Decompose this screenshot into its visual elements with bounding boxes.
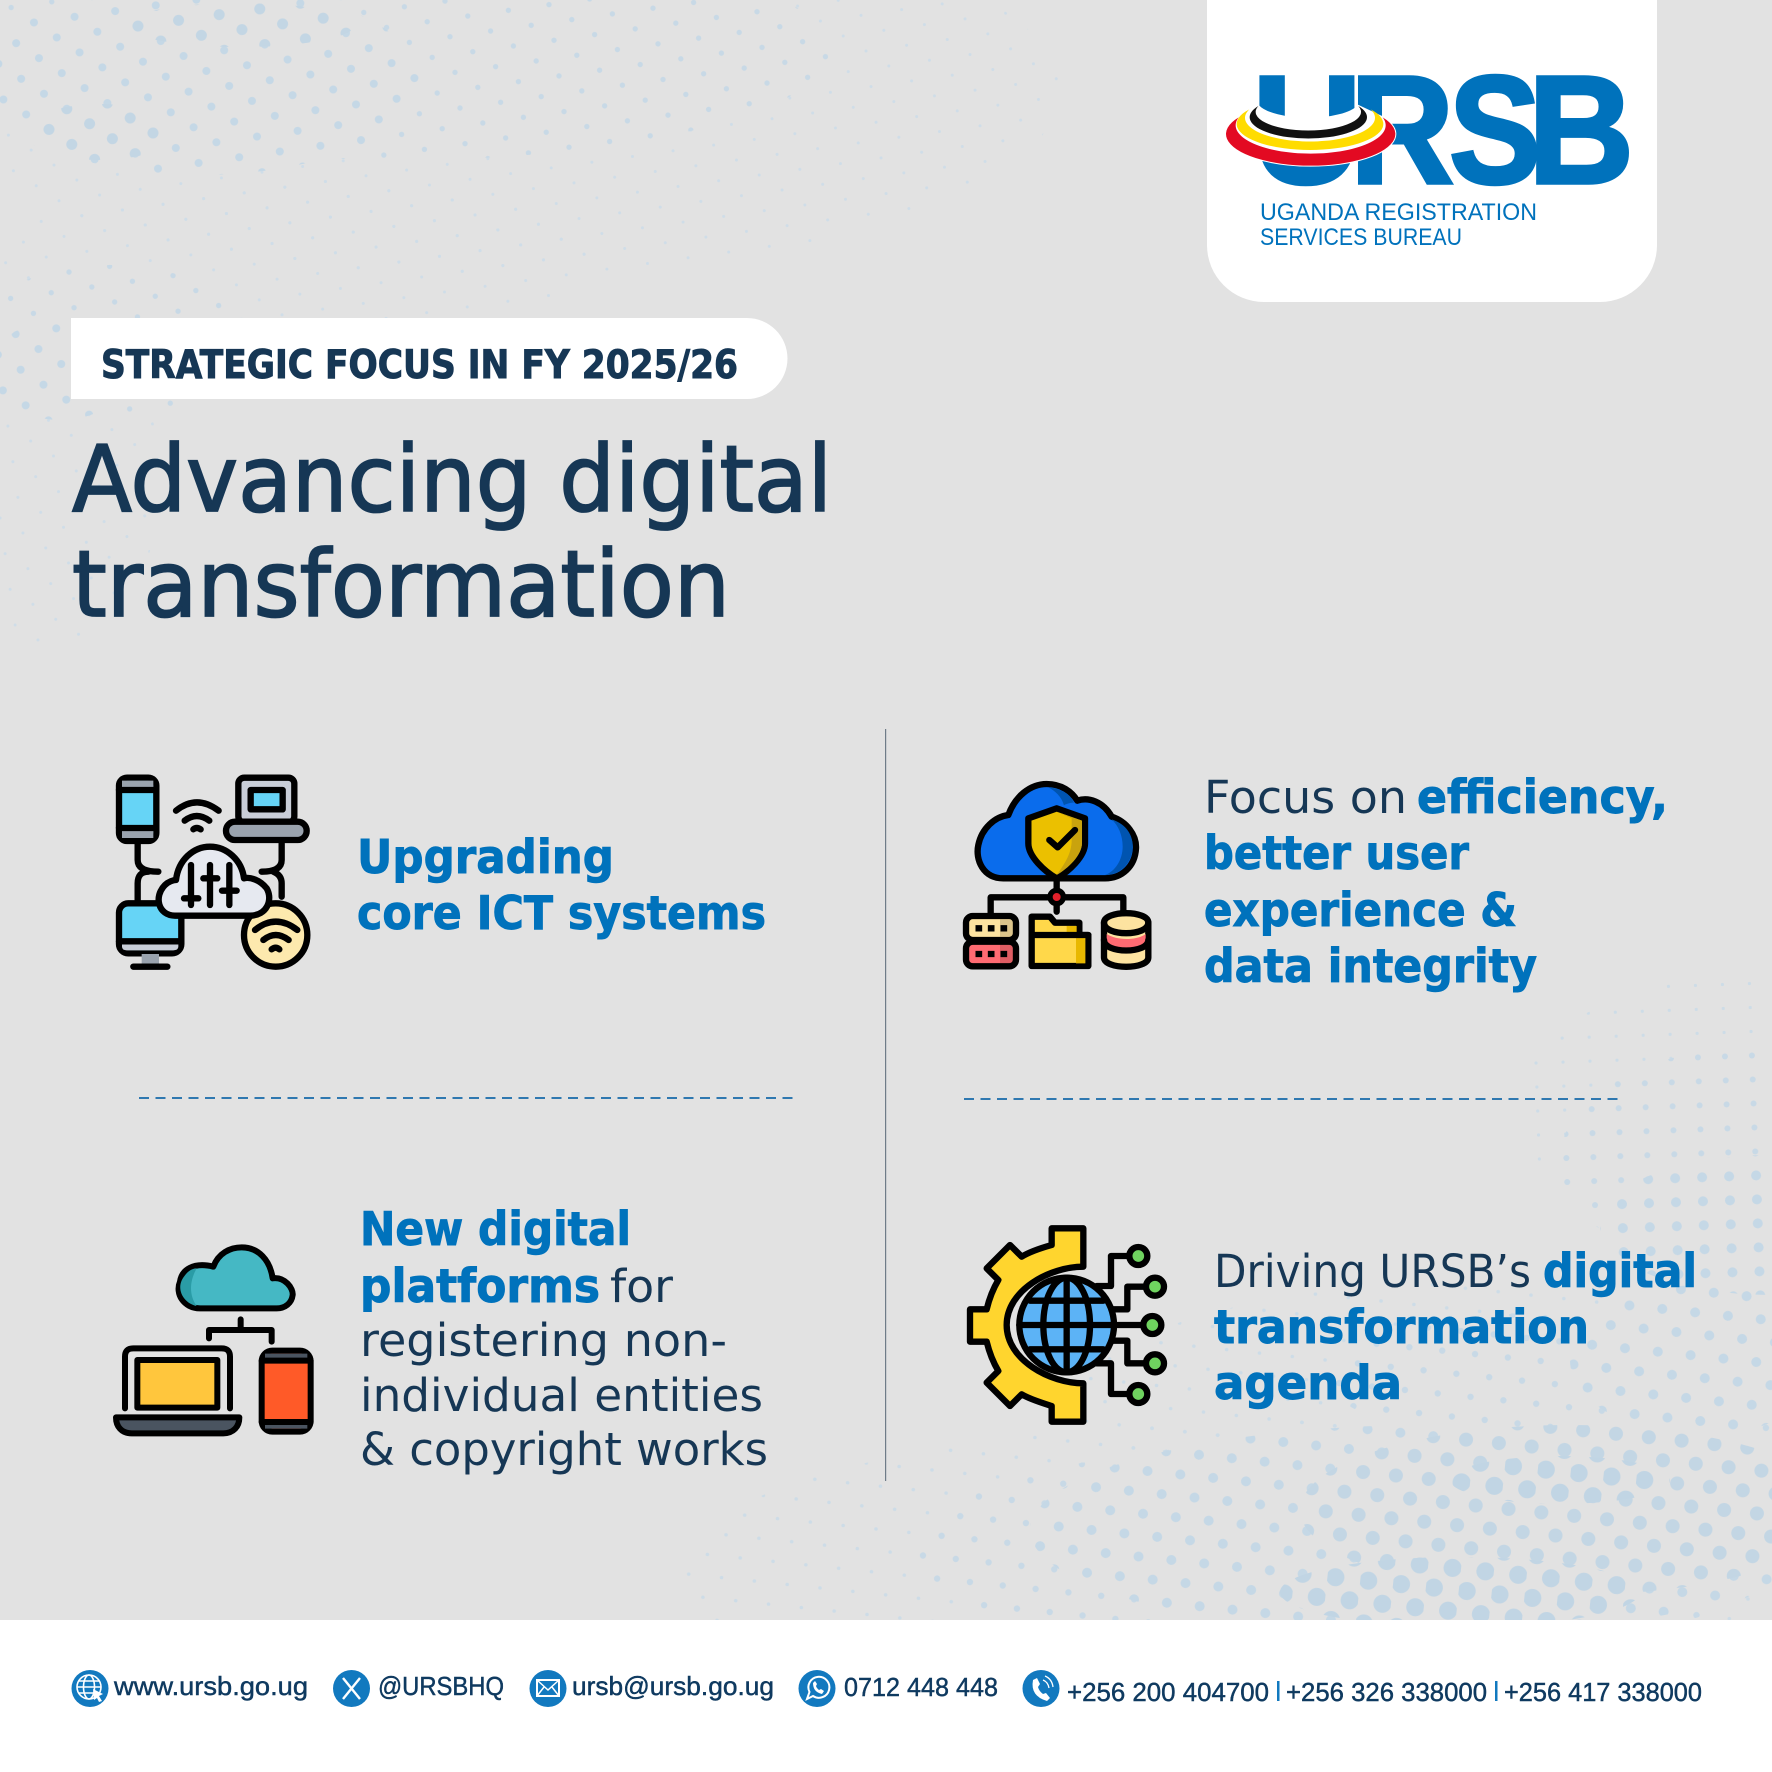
text: efficiency: data integrity (1204, 939, 1537, 993)
contact: email (530, 1670, 774, 1707)
text: upgrading core ICT systems (357, 830, 766, 940)
pill background (71, 318, 787, 399)
text: upgrading core ICT systems: Upgrading (357, 830, 614, 884)
text: new digital platforms: New digital (360, 1202, 631, 1256)
text: efficiency: Focus on (1204, 771, 1407, 824)
icon: X (333, 1670, 370, 1707)
halftone dots: bottom right (680, 1280, 1772, 1720)
icon: gear globe circuit (970, 1228, 1164, 1422)
contact: email: ursb@ursb.go.ug (572, 1671, 774, 1701)
text: digital transformation agenda (1214, 1244, 1697, 1410)
halftone dots: right side (1520, 980, 1772, 1295)
logo subtitle (1260, 199, 1537, 251)
logo wordmark: S (1449, 44, 1541, 216)
icon: whatsapp (798, 1670, 836, 1707)
text: digital transformation agenda: transformation (1214, 1300, 1589, 1354)
icon: globe (72, 1670, 108, 1707)
icon: envelope (530, 1670, 566, 1707)
item: digital transformation agenda (970, 1228, 1697, 1422)
icon: cloud security data (966, 784, 1148, 967)
text: new digital platforms: registering non- (360, 1314, 727, 1367)
horizontal dashed dividers (139, 1098, 1621, 1099)
icon: cloud network devices (119, 778, 307, 967)
main title: Advancing digital (72, 426, 832, 533)
logo wordmark: R (1350, 44, 1454, 216)
white panel (1207, 0, 1657, 302)
vertical divider (885, 729, 886, 1481)
logo wordmark: B (1528, 44, 1634, 216)
item: efficiency (966, 770, 1668, 993)
logo subtitle: SERVICES BUREAU (1260, 224, 1462, 251)
contact: whatsapp (798, 1670, 998, 1707)
text: new digital platforms: for (610, 1260, 674, 1313)
icon: phone (1022, 1670, 1060, 1707)
pill heading (71, 318, 787, 399)
text: new digital platforms: platforms (360, 1259, 600, 1313)
logo wordmark: U (1252, 44, 1362, 216)
text: efficiency: better user (1204, 826, 1469, 880)
main title (72, 426, 832, 638)
contact: X handle: @URSBHQ (378, 1671, 504, 1701)
contact: phone numbers: +256 417 338000 (1504, 1677, 1702, 1707)
contact: website (72, 1670, 308, 1707)
pill text: STRATEGIC FOCUS IN FY 2025/26 (101, 343, 738, 388)
icon: cloud laptop phone (116, 1247, 311, 1433)
contact: phone numbers: +256 200 404700 (1067, 1677, 1269, 1707)
text: efficiency: efficiency, (1417, 770, 1668, 824)
logo subtitle: UGANDA REGISTRATION (1260, 199, 1537, 226)
logo basket rings (1226, 106, 1395, 166)
logo wordmark (1252, 44, 1634, 216)
footer band (0, 1620, 1772, 1772)
item: upgrading core ICT systems (119, 778, 766, 967)
text: digital transformation agenda: Driving URSB’s (1214, 1245, 1531, 1298)
text: new digital platforms (360, 1202, 768, 1476)
text: efficiency: experience & (1204, 883, 1517, 937)
text: new digital platforms: & copyright works (360, 1423, 768, 1476)
contact: phone numbers: +256 326 338000 (1286, 1677, 1487, 1707)
footer (0, 1620, 1772, 1772)
text: digital transformation agenda: agenda (1214, 1356, 1402, 1410)
text: new digital platforms: individual entities (360, 1369, 763, 1422)
contact: whatsapp: 0712 448 448 (844, 1672, 998, 1702)
contact: website: www.ursb.go.ug (113, 1671, 308, 1701)
item: new digital platforms (116, 1202, 768, 1476)
contact: X handle (333, 1670, 504, 1707)
halftone dots: top left (0, 0, 1060, 650)
contact: phone numbers (1022, 1670, 1702, 1707)
text: efficiency (1204, 770, 1668, 993)
text: digital transformation agenda: digital (1543, 1244, 1697, 1298)
main title: transformation (72, 531, 730, 638)
logo panel (1207, 0, 1657, 302)
text: upgrading core ICT systems: core ICT systems (357, 886, 766, 940)
